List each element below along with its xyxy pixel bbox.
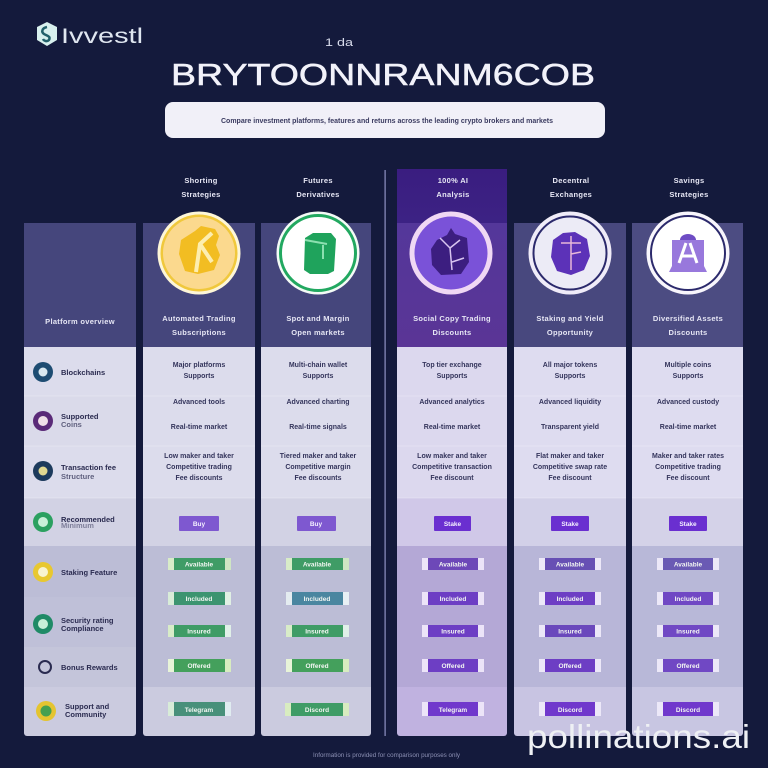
column 5 button bbox=[669, 516, 707, 531]
column 1 sub heading: Subscriptions bbox=[172, 328, 226, 337]
column 4 purple chips: Offered bbox=[558, 663, 582, 670]
column 2 sub heading: Open markets bbox=[291, 328, 345, 337]
logo bbox=[37, 22, 143, 48]
column 4 heading: Exchanges bbox=[550, 190, 592, 199]
row 6 label: Compliance bbox=[61, 624, 104, 633]
column 1 text rows bbox=[164, 362, 234, 482]
column 4 purple chips: Discord bbox=[558, 707, 582, 714]
row 1 label bbox=[33, 362, 105, 382]
row 8 label: Community bbox=[65, 710, 107, 719]
column 1: gold bbox=[143, 176, 255, 736]
column 2 button bbox=[297, 516, 336, 531]
column 5 purple chips bbox=[657, 558, 719, 716]
column 2 text rows: Competitive margin bbox=[285, 464, 351, 471]
column 4: violet bbox=[514, 176, 626, 736]
column 5 sub heading: Discounts bbox=[669, 328, 707, 337]
column 3 purple chips bbox=[422, 558, 484, 716]
row 2 label: Coins bbox=[61, 420, 82, 429]
row 6 label bbox=[33, 614, 114, 634]
column 5 purple chips: Included bbox=[675, 596, 701, 603]
column 5 text rows bbox=[652, 362, 724, 482]
column 3 sub heading: Discounts bbox=[433, 328, 471, 337]
column 3 text rows: Supports bbox=[437, 373, 467, 380]
column 2 text rows: Supports bbox=[303, 373, 333, 380]
column 2 green chips: Included bbox=[304, 596, 330, 603]
row 3 label: Transaction fee bbox=[61, 463, 116, 472]
column 1 text rows: Fee discounts bbox=[175, 475, 223, 482]
column 1 text rows: Supports bbox=[184, 373, 214, 380]
row 7 label: Bonus Rewards bbox=[61, 663, 118, 672]
row 4 label bbox=[33, 512, 115, 532]
row 5 label bbox=[33, 562, 117, 582]
row 6 label: Security rating bbox=[61, 616, 114, 625]
column 1 green chips bbox=[168, 558, 231, 716]
column 5 purple chips: Available bbox=[674, 562, 703, 568]
column 5 button: Stake bbox=[679, 521, 697, 528]
column 3 purple chips: Included bbox=[440, 596, 466, 603]
column 5 text rows: Real-time market bbox=[660, 424, 717, 431]
small top label: 1 da bbox=[325, 37, 354, 49]
column 5 heading bbox=[669, 176, 709, 199]
column 5 heading: Savings bbox=[674, 176, 704, 185]
column 1 green chips: Offered bbox=[187, 663, 211, 670]
column 2 heading: Derivatives bbox=[296, 190, 340, 199]
icon: purple coin bbox=[410, 212, 492, 294]
column 5 text rows: Competitive trading bbox=[655, 464, 721, 471]
column 1 text rows: Competitive trading bbox=[166, 464, 232, 471]
column 4 heading bbox=[550, 176, 592, 199]
column 1 green chips: Included bbox=[186, 596, 212, 603]
column 2 text rows bbox=[280, 362, 357, 482]
row 2 label: Supported bbox=[61, 412, 99, 421]
column 1 text rows: Advanced tools bbox=[173, 399, 225, 406]
centre divider bbox=[384, 170, 386, 736]
column 3 button bbox=[434, 516, 471, 531]
row 5 label: Staking Feature bbox=[61, 568, 117, 577]
column 1 text rows: Low maker and taker bbox=[164, 453, 234, 460]
column 2 heading bbox=[296, 176, 340, 199]
column 2 text rows: Tiered maker and taker bbox=[280, 453, 357, 460]
subtitle bar: Compare investment platforms, features and returns across the leading crypto brokers and markets bbox=[221, 118, 553, 125]
row 7 label bbox=[39, 661, 118, 673]
column 1 heading bbox=[181, 176, 221, 199]
column 5 text rows: Supports bbox=[673, 373, 703, 380]
column 4 button bbox=[551, 516, 589, 531]
column 3 text rows: Top tier exchange bbox=[422, 362, 482, 369]
column 1 button bbox=[179, 516, 219, 531]
column 4 text rows: All major tokens bbox=[543, 362, 597, 369]
row 4 label: Minimum bbox=[61, 521, 94, 530]
column 1 sub heading: Automated Trading bbox=[162, 314, 236, 323]
column 5 purple chips: Insured bbox=[676, 628, 700, 636]
column 2 text rows: Fee discounts bbox=[294, 475, 342, 482]
row 8 label: Support and bbox=[65, 702, 110, 711]
row 3 label bbox=[33, 461, 116, 481]
title: BRYTOONNRANM6COB bbox=[171, 57, 595, 92]
column 3 sub heading bbox=[413, 314, 491, 337]
column 3 purple chips: Telegram bbox=[439, 707, 467, 714]
column 5 purple chips: Offered bbox=[676, 663, 700, 670]
column 3 text rows bbox=[412, 362, 492, 482]
column 4 purple chips: Included bbox=[557, 596, 583, 603]
column 2: green bbox=[261, 176, 371, 736]
column 2 text rows: Advanced charting bbox=[286, 399, 350, 406]
column 3 sub heading: Social Copy Trading bbox=[413, 314, 491, 323]
column 4 heading: Decentral bbox=[553, 176, 589, 185]
column 5 text rows: Advanced custody bbox=[657, 399, 719, 406]
column 3 heading: Analysis bbox=[436, 190, 470, 199]
column 4 text rows: Competitive swap rate bbox=[533, 464, 607, 471]
column 1 green chips: Available bbox=[185, 562, 214, 568]
column 3 text rows: Low maker and taker bbox=[417, 453, 487, 460]
column 4 text rows: Supports bbox=[555, 373, 585, 380]
column 4 text rows: Transparent yield bbox=[541, 424, 599, 431]
column 5 text rows: Maker and taker rates bbox=[652, 453, 724, 460]
column 5 sub heading bbox=[653, 314, 723, 337]
icon: violet coin bbox=[528, 212, 612, 294]
row 2 label bbox=[33, 411, 99, 431]
row 4 label: Recommended bbox=[61, 515, 115, 524]
column 4 text rows: Fee discount bbox=[548, 475, 592, 482]
column 4 purple chips bbox=[539, 558, 601, 716]
column 2 text rows: Multi-chain wallet bbox=[289, 362, 348, 369]
footer note: Information is provided for comparison purposes only bbox=[313, 752, 461, 759]
column 1 text rows: Real-time market bbox=[171, 424, 228, 431]
column 3 purple chips: Available bbox=[439, 562, 468, 568]
column 2 green chips: Available bbox=[303, 562, 332, 568]
column 4 text rows: Advanced liquidity bbox=[539, 399, 601, 406]
column 4 purple chips: Available bbox=[556, 562, 585, 568]
icon: gold coin bbox=[158, 212, 240, 294]
column 2 text rows: Real-time signals bbox=[289, 424, 347, 431]
column 3 text rows: Real-time market bbox=[424, 424, 481, 431]
column 1 text rows: Major platforms bbox=[173, 362, 225, 369]
column: row labels bbox=[24, 223, 136, 736]
column 4 button: Stake bbox=[561, 521, 579, 528]
column 5 text rows: Fee discount bbox=[666, 475, 710, 482]
column 1 green chips: Insured bbox=[187, 628, 211, 636]
watermark: pollinations.ai bbox=[527, 718, 750, 755]
column 2 sub heading: Spot and Margin bbox=[286, 314, 350, 323]
column 4 text rows bbox=[533, 362, 607, 482]
column 3 text rows: Competitive transaction bbox=[412, 464, 492, 471]
row 8 label bbox=[36, 701, 110, 721]
column 2 green chips: Insured bbox=[305, 628, 329, 636]
column 2 heading: Futures bbox=[303, 176, 333, 185]
column 2 green chips: Offered bbox=[305, 663, 329, 670]
row dividers bbox=[24, 396, 743, 498]
column 4 sub heading bbox=[536, 314, 604, 337]
column 2 button: Buy bbox=[310, 521, 323, 528]
column 5: white violet bbox=[632, 176, 743, 736]
row 3 label: Structure bbox=[61, 472, 94, 481]
column 3 heading bbox=[436, 176, 470, 199]
column 5 text rows: Multiple coins bbox=[665, 362, 711, 369]
column 3 text rows: Advanced analytics bbox=[419, 399, 485, 406]
column 2 green chips bbox=[285, 558, 349, 716]
column 4 sub heading: Opportunity bbox=[547, 328, 594, 337]
label heading: Platform overview bbox=[45, 317, 115, 326]
column 1 heading: Shorting bbox=[184, 176, 218, 185]
column 1 sub heading bbox=[162, 314, 236, 337]
column 5 heading: Strategies bbox=[669, 190, 709, 199]
icon: green coin bbox=[276, 212, 360, 294]
column 3: highlighted purple bbox=[397, 169, 507, 736]
row 1 label: Blockchains bbox=[61, 368, 105, 377]
column 1 button: Buy bbox=[193, 521, 206, 528]
icon: logo mark bbox=[37, 22, 57, 46]
column 2 green chips: Discord bbox=[305, 707, 329, 714]
icon: white coin bbox=[646, 212, 730, 294]
column 3 text rows: Fee discount bbox=[430, 475, 474, 482]
subtitle bar bbox=[165, 102, 605, 138]
column 4 sub heading: Staking and Yield bbox=[536, 314, 604, 323]
column 3 purple chips: Offered bbox=[441, 663, 465, 670]
column 3 button: Stake bbox=[444, 521, 462, 528]
logo wordmark: Ivvestl bbox=[61, 25, 143, 48]
column 1 green chips: Telegram bbox=[185, 707, 213, 714]
column 5 purple chips: Discord bbox=[676, 707, 700, 714]
column 3 heading: 100% AI bbox=[438, 176, 468, 185]
column 3 purple chips: Insured bbox=[441, 628, 465, 636]
column 4 purple chips: Insured bbox=[558, 628, 582, 636]
column 1 heading: Strategies bbox=[181, 190, 221, 199]
column 5 sub heading: Diversified Assets bbox=[653, 314, 723, 323]
column 4 text rows: Flat maker and taker bbox=[536, 453, 604, 460]
column 2 sub heading bbox=[286, 314, 350, 337]
